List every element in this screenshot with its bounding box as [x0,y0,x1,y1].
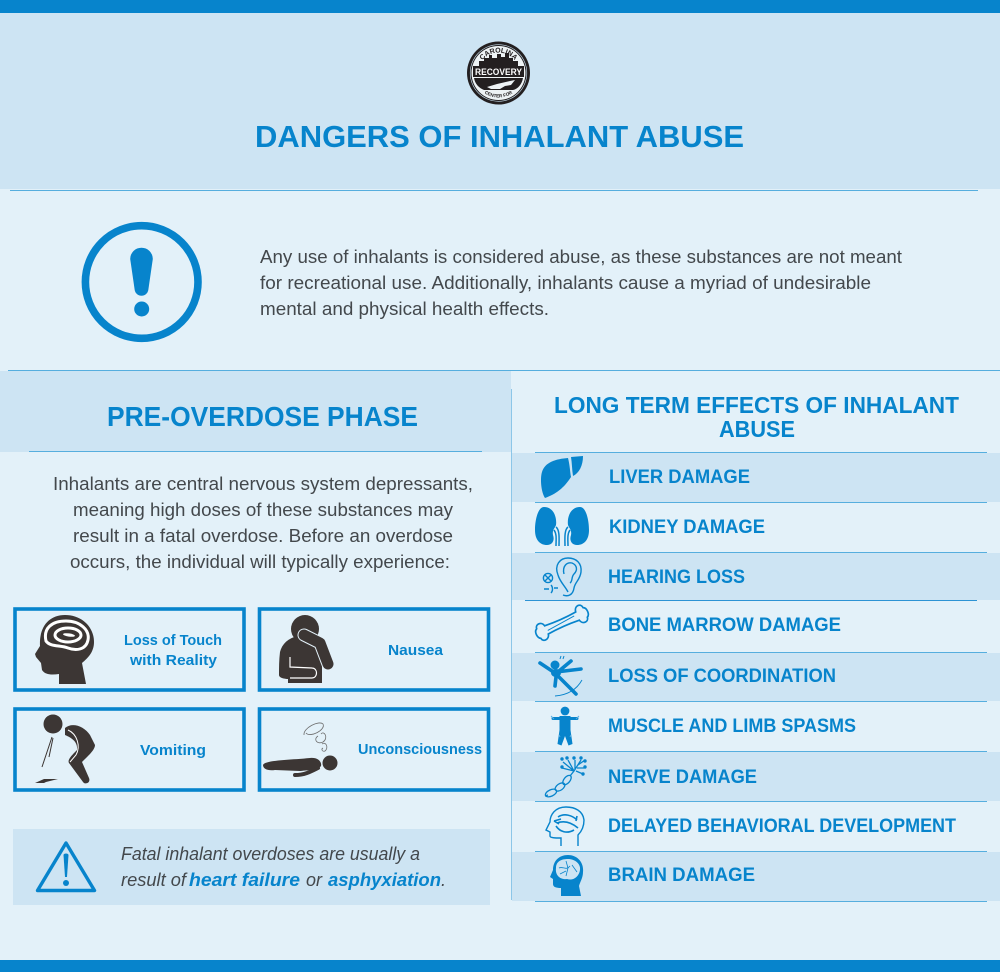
card: nausea [260,609,488,690]
card: loss of touch with reality: Loss of Touch [124,633,222,649]
bottom bar [0,960,1000,972]
icon: person covering mouth [279,615,328,683]
icon: nerve cell [544,756,587,798]
callout: fatal overdoses: result of [121,870,188,890]
logo: Carolina Recovery Center: CENTER FOR [485,91,512,98]
row: brain damage: BRAIN DAMAGE [608,865,755,886]
icon: standing figure [551,707,579,746]
callout: fatal overdoses: Fatal inhalant overdoses are usually a [121,844,420,864]
card: loss of touch with reality: with Reality [129,653,217,669]
callout: fatal overdoses: . [441,870,446,890]
heading: long term effects [554,392,960,442]
pre-overdose text: meaning high doses of these substances may [73,500,453,520]
intro text [260,247,902,319]
logo: Carolina Recovery Center: CAROLINA [480,48,517,60]
icon: person vomiting [35,714,95,783]
row: delayed behavioral development: DELAYED BEHAVIORAL DEVELOPMENT [608,816,956,837]
panel: long term effects [511,389,1000,902]
row: bone marrow damage [532,603,841,642]
callout: fatal overdoses: or [306,870,323,890]
pre-overdose text: Inhalants are central nervous system depressants, [53,474,473,494]
heading: long term effects: LONG TERM EFFECTS OF INHALANT [554,392,960,418]
top bar [0,0,1000,13]
panel: header [0,13,1000,191]
card: vomiting [15,709,244,790]
panel: intro [85,226,902,338]
row: loss of coordination: LOSS OF COORDINATION [608,666,836,687]
panel: pre-overdose phase [0,371,511,905]
card: loss of touch with reality [15,609,244,690]
row: bone marrow damage: BONE MARROW DAMAGE [608,615,841,636]
heading: long term effects: ABUSE [719,416,795,442]
card: unconsciousness [260,709,488,790]
callout: fatal overdoses: asphyxiation [328,870,441,890]
pre-overdose text [53,474,473,572]
logo: Carolina Recovery Center [467,42,530,104]
icon: ear [543,558,581,596]
row: liver damage [541,456,750,498]
icon: kidneys [535,507,589,546]
icon: exclamation circle [85,226,198,338]
row: nerve damage: NERVE DAMAGE [608,767,757,788]
card: nausea: Nausea [388,643,444,659]
heading: pre-overdose phase: PRE-OVERDOSE PHASE [107,401,418,432]
row: muscle and limb spasms [551,707,856,746]
card: unconsciousness: Unconsciousness [358,742,482,758]
row: loss of coordination [540,656,836,696]
row: brain damage [550,855,755,896]
card: vomiting: Vomiting [140,743,206,759]
intro text: mental and physical health effects. [260,299,549,319]
title: DANGERS OF INHALANT ABUSE [255,119,744,154]
icon: head with swirl [35,615,94,684]
icon: head with brain [550,855,583,896]
row: hearing loss [543,558,745,596]
icon: bone [532,603,591,642]
callout: fatal overdoses [13,829,490,905]
icon: liver [541,456,583,498]
row dividers [525,452,987,902]
row: kidney damage [535,507,765,546]
icon: warning triangle [38,843,94,890]
callout: fatal overdoses: heart failure [189,870,300,890]
intro text: Any use of inhalants is considered abuse, as these substances are not meant [260,247,902,267]
row: kidney damage: KIDNEY DAMAGE [609,517,765,538]
row: muscle and limb spasms: MUSCLE AND LIMB SPASMS [608,716,856,737]
row: delayed behavioral development [546,807,956,846]
intro text: for recreational use. Additionally, inhalants cause a myriad of undesirable [260,273,871,293]
row bands [512,453,1000,901]
icon: head outline with arrows [546,807,584,846]
icon: person lying down [263,723,338,775]
row: nerve damage [544,756,757,798]
icon: falling person [540,656,582,696]
pre-overdose text: result in a fatal overdose. Before an overdose [73,526,453,546]
row: liver damage: LIVER DAMAGE [609,467,750,488]
pre-overdose text: occurs, the individual will typically experience: [70,552,450,572]
row: hearing loss: HEARING LOSS [608,567,745,588]
logo: Carolina Recovery Center: RECOVERY [475,67,523,78]
